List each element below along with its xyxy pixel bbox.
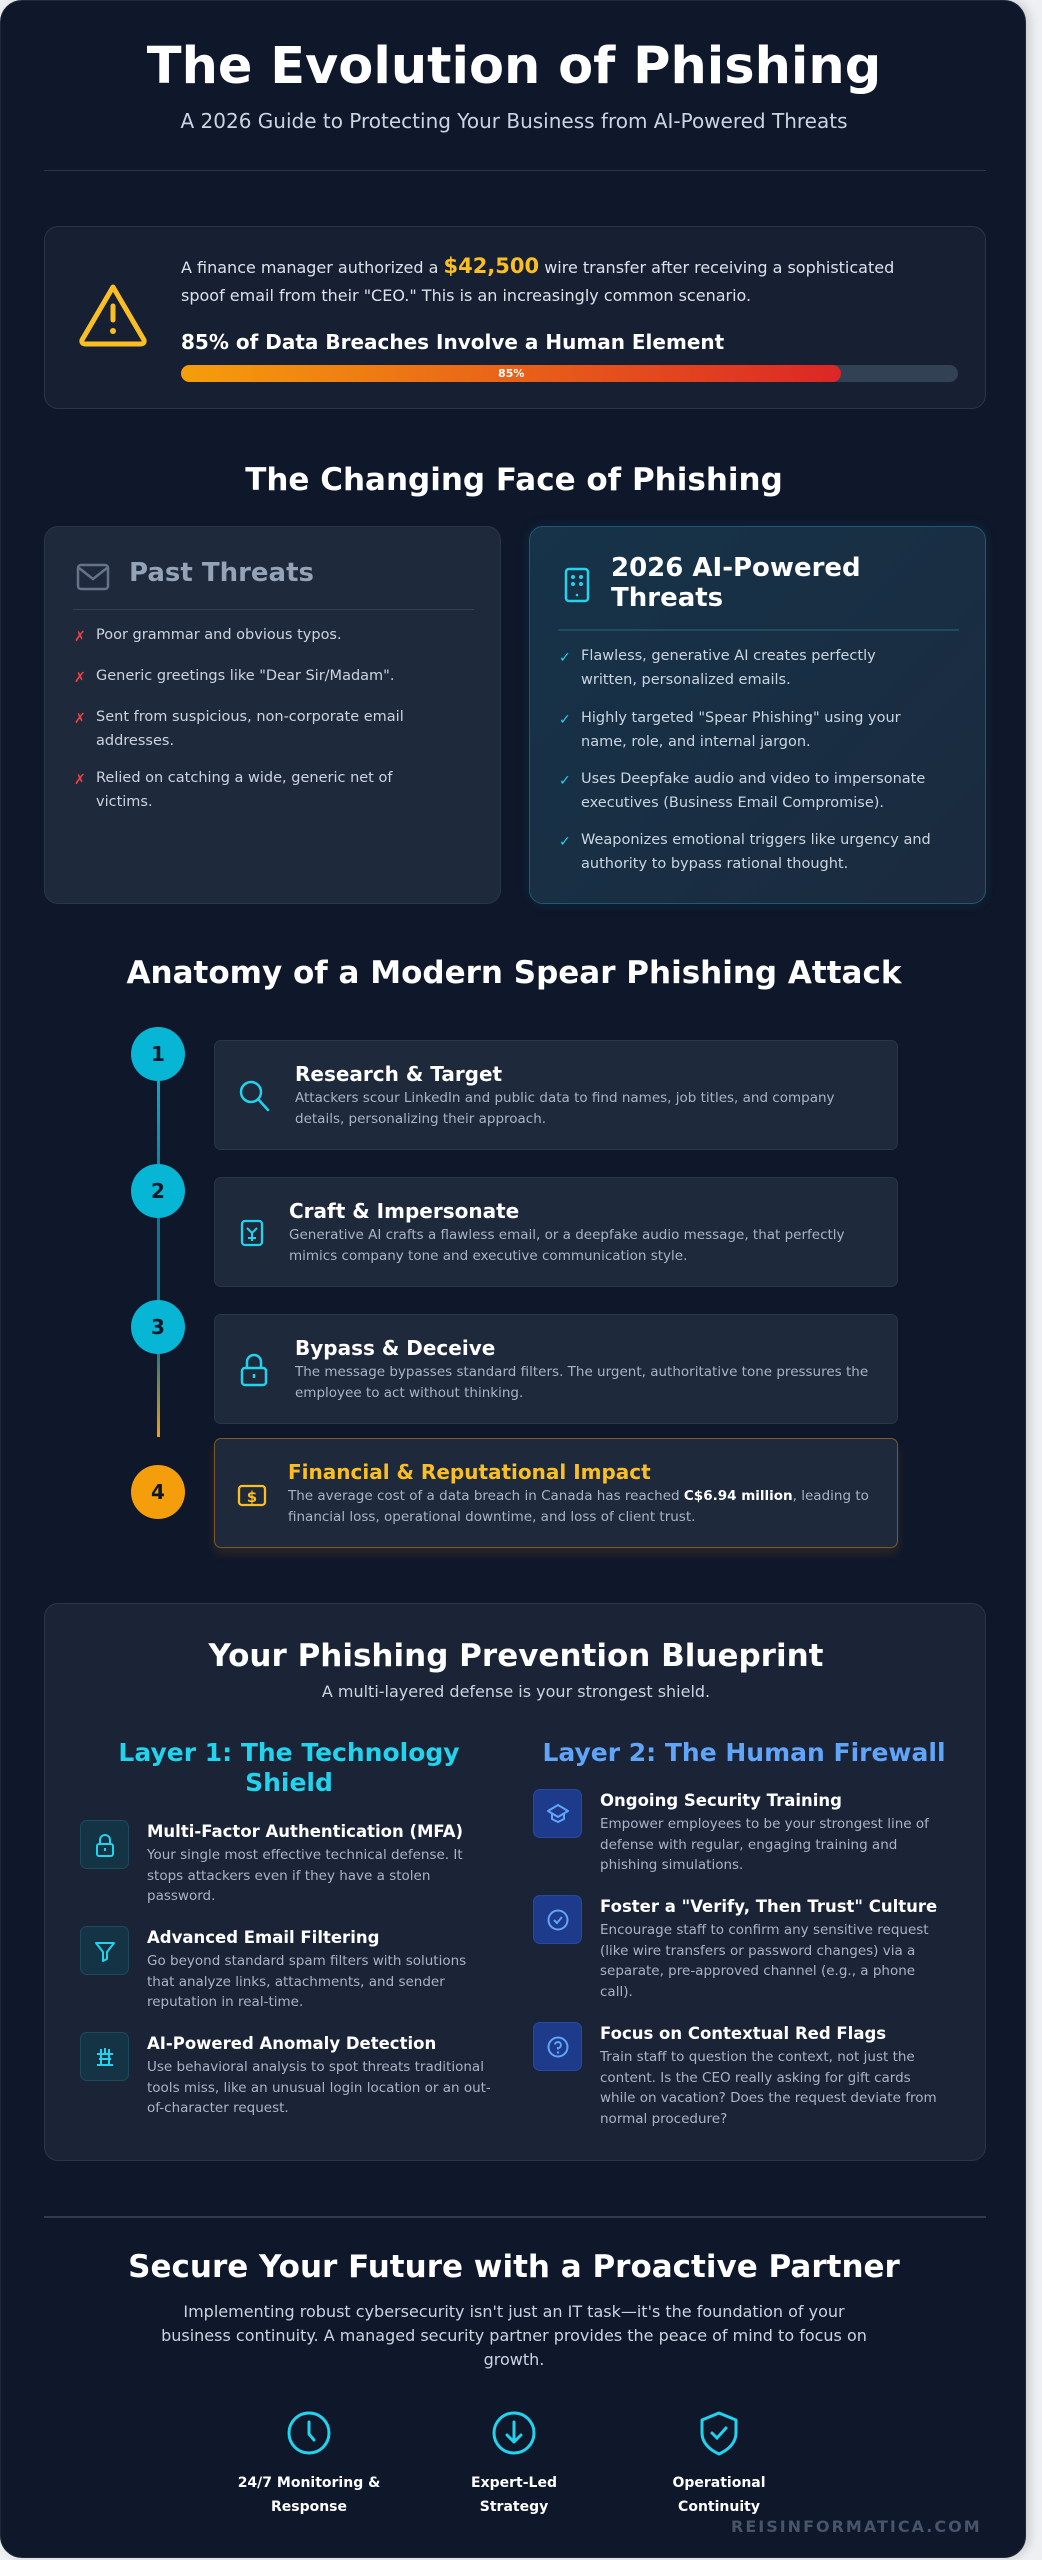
item: anomaly detection: Use behavioral analysis to spot threats traditional [147, 2059, 484, 2075]
step card 1: Attackers scour LinkedIn and public data to find names, job titles, and company [295, 1090, 835, 1106]
step card 4: The average cost of a data breach in Canada has reached C$6.94 million, leading to [288, 1488, 869, 1504]
heading: Past Threats [129, 558, 314, 588]
step 1 number [131, 1027, 185, 1081]
step 3 number: 3 [151, 1315, 165, 1339]
step card 2: Generative AI crafts a flawless email, or a deepfake audio message, that perfectly [289, 1227, 845, 1243]
step card 3: employee to act without thinking. [295, 1385, 523, 1401]
text: closing paragraph: Implementing robust cybersecurity isn't just an IT task—it's the foundation of your [183, 2302, 845, 2321]
item: verify culture: call). [600, 1984, 633, 2000]
item: email filtering: reputation in real-time. [147, 1994, 303, 2010]
icon: AI craft [240, 1220, 264, 1246]
item: verify culture: separate, pre-approved channel (e.g., a phone [600, 1963, 915, 1979]
item: red flags: content. Is the CEO really asking for gift cards [600, 2070, 911, 2086]
title: The Evolution of Phishing [147, 37, 881, 96]
item: MFA: stops attackers even if they have a stolen [147, 1868, 430, 1884]
layer 1 title [118, 1738, 460, 1797]
benefit: monitoring: Response [271, 2499, 347, 2515]
step card 3: Bypass & Deceive [295, 1336, 495, 1360]
step card 3: The message bypasses standard filters. The urgent, authoritative tone pressures the [295, 1364, 868, 1380]
item: verify culture: Encourage staff to confirm any sensitive request [600, 1922, 929, 1938]
benefit: strategy: Strategy [480, 2499, 548, 2515]
timeline [131, 1027, 185, 1519]
benefit: strategy [471, 2412, 557, 2515]
progress bar: 85% [498, 367, 524, 380]
panel: AI threats: executives (Business Email Compromise). [581, 795, 884, 811]
item: MFA: Your single most effective technical defense. It [147, 1847, 463, 1863]
text: closing paragraph [161, 2302, 867, 2369]
heading: Your Phishing Prevention Blueprint [209, 1638, 823, 1674]
panel: AI threats: Uses Deepfake audio and video to impersonate [581, 771, 925, 787]
watermark: REISINFORMATICA.COM [731, 2517, 982, 2536]
step 4 number [131, 1465, 185, 1519]
benefit: monitoring [238, 2412, 380, 2515]
heading: 2026 AI-Powered [611, 553, 861, 583]
step 3 number [131, 1300, 185, 1354]
item: email filtering [80, 1926, 466, 2010]
item: email filtering: Advanced Email Filtering [147, 1928, 379, 1947]
step card 3 [214, 1314, 898, 1424]
step 4 number: 4 [151, 1480, 165, 1504]
icon: device [564, 568, 590, 602]
layer 1 title: Shield [245, 1768, 333, 1797]
item: MFA: password. [147, 1888, 215, 1904]
icon: lock [240, 1354, 268, 1386]
step 1 number: 1 [151, 1042, 165, 1066]
item: verify culture: Foster a "Verify, Then Trust" Culture [600, 1897, 937, 1916]
item: email filtering: Go beyond standard spam filters with solutions [147, 1953, 466, 1969]
benefit: continuity: Operational [672, 2475, 766, 2491]
subheading: A multi-layered defense is your strongest shield. [322, 1682, 710, 1701]
subtitle: A 2026 Guide to Protecting Your Business from AI-Powered Threats [180, 109, 848, 133]
panel: AI threats: ✓ [559, 773, 571, 789]
panel: past threats: Relied on catching a wide, generic net of [96, 770, 392, 786]
item: anomaly detection: of-character request. [147, 2100, 289, 2116]
panel: past threats [44, 526, 501, 904]
stat heading: 85% of Data Breaches Involve a Human Element [181, 330, 724, 354]
item: anomaly detection: tools miss, like an unusual login location or an out- [147, 2080, 491, 2096]
benefit: continuity: Continuity [678, 2499, 760, 2515]
icon: envelope [76, 564, 110, 590]
layer 2 title: Layer 2: The Human Firewall [542, 1738, 946, 1767]
item: verify culture [533, 1895, 937, 2000]
step card 4: financial loss, operational downtime, and loss of client trust. [288, 1509, 695, 1525]
step card 2: Craft & Impersonate [289, 1199, 519, 1223]
item: MFA [80, 1820, 463, 1904]
panel: AI threats: ✓ [559, 650, 571, 666]
list: written, personalized emails. [581, 672, 791, 688]
panel: past threats: ✗ [74, 670, 86, 686]
icon: warning [79, 284, 147, 346]
item: verify culture: (like wire transfers or password changes) via a [600, 1942, 915, 1958]
benefit: continuity [672, 2412, 766, 2515]
item: anomaly detection: AI-Powered Anomaly Detection [147, 2034, 436, 2053]
list: Flawless, generative AI creates perfectly [581, 648, 876, 664]
panel: AI threats: ✓ [559, 712, 571, 728]
panel: past threats: addresses. [96, 733, 174, 749]
list [559, 648, 876, 688]
step card 4: Financial & Reputational Impact [288, 1460, 651, 1484]
item: training: Ongoing Security Training [600, 1791, 842, 1810]
benefit: monitoring: 24/7 Monitoring & [238, 2475, 380, 2491]
panel: past threats: Sent from suspicious, non-corporate email [96, 709, 404, 725]
item: training: defense with regular, engaging training and [600, 1836, 897, 1852]
item: red flags [533, 2022, 937, 2126]
heading: changing face: The Changing Face of Phishing [245, 462, 783, 498]
icon: money [238, 1484, 266, 1506]
panel: AI threats: Weaponizes emotional triggers like urgency and [581, 832, 931, 848]
item: red flags: Focus on Contextual Red Flags [600, 2024, 886, 2043]
step card 4 [214, 1438, 898, 1548]
step card 1: details, personalizing their approach. [295, 1111, 546, 1127]
heading: proactive partner: Secure Your Future with a Proactive Partner [128, 2249, 900, 2285]
step card 1 [214, 1040, 898, 1150]
panel: past threats: ✗ [74, 711, 86, 727]
panel: past threats: victims. [96, 794, 153, 810]
text: closing paragraph: business continuity. A managed security partner provides the peace of mind to focus on [161, 2326, 867, 2345]
item: anomaly detection [80, 2032, 491, 2116]
panel: AI threats: ✓ [559, 834, 571, 850]
step card 2 [214, 1177, 898, 1287]
step card 2: mimics company tone and executive communication style. [289, 1248, 687, 1264]
item: red flags: normal procedure? [600, 2110, 727, 2126]
panel: AI threats: authority to bypass rational thought. [581, 856, 848, 872]
heading: anatomy: Anatomy of a Modern Spear Phishing Attack [127, 955, 901, 991]
benefit: strategy: Expert-Led [471, 2475, 557, 2491]
item: training: Empower employees to be your strongest line of [600, 1816, 929, 1832]
text: scenario: A finance manager authorized a $42,500 wire transfer after receiving a sophisticated [181, 254, 894, 278]
panel: AI threats [529, 526, 986, 904]
panel: AI threats: name, role, and internal jargon. [581, 734, 811, 750]
layer 1 title: Layer 1: The Technology [118, 1738, 460, 1767]
item: MFA: Multi-Factor Authentication (MFA) [147, 1822, 463, 1841]
text: scenario [181, 254, 894, 305]
panel: alert stat [44, 226, 986, 409]
heading [611, 553, 861, 613]
text: closing paragraph: growth. [484, 2350, 544, 2369]
step card 1: Research & Target [295, 1062, 502, 1086]
icon: money: $ [247, 1488, 257, 1506]
item: red flags: while on vacation? Does the request deviate from [600, 2090, 937, 2106]
panel: prevention blueprint [44, 1603, 986, 2161]
list: Poor grammar and obvious typos. [96, 627, 342, 643]
step 2 number: 2 [151, 1179, 165, 1203]
panel: past threats: Generic greetings like "Dear Sir/Madam". [96, 668, 394, 684]
progress bar [181, 365, 958, 382]
item: red flags: Train staff to question the context, not just the [600, 2049, 915, 2065]
item: training [533, 1789, 930, 1873]
panel: past threats: ✗ [74, 772, 86, 788]
step 2 number [131, 1164, 185, 1218]
heading: Threats [611, 583, 723, 613]
item: training: phishing simulations. [600, 1857, 743, 1873]
item: email filtering: that analyze links, attachments, and sender [147, 1974, 445, 1990]
text: scenario: spoof email from their "CEO." This is an increasingly common scenario. [181, 286, 751, 305]
panel: AI threats: Highly targeted "Spear Phishing" using your [581, 710, 901, 726]
icon: search [240, 1080, 270, 1112]
panel: past threats: ✗ [74, 629, 86, 645]
